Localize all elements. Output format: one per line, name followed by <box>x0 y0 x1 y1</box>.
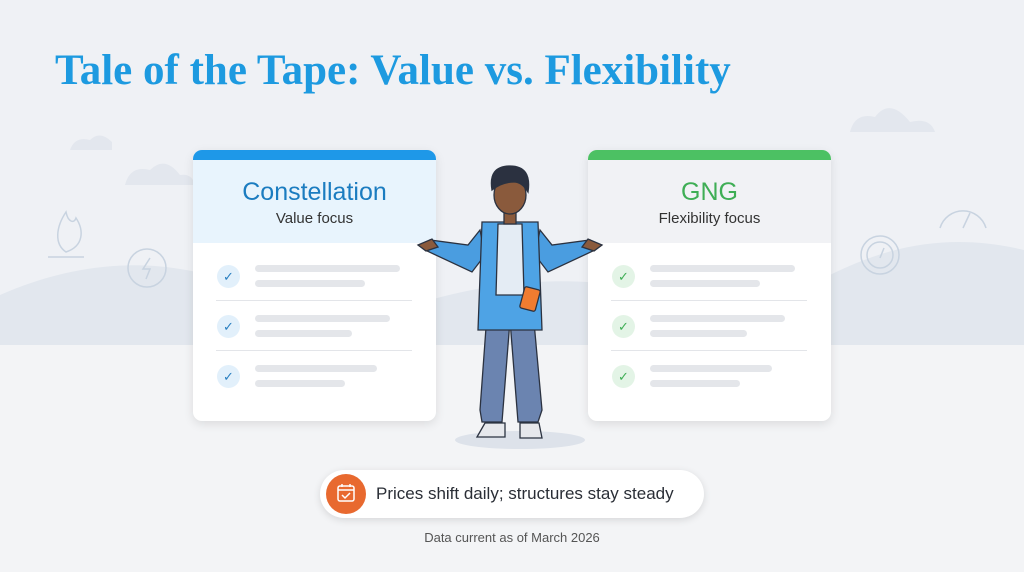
panel: Constellation: ✓ <box>223 269 234 284</box>
header: Constellation: Value focus <box>276 210 353 227</box>
panel: Constellation: ✓ <box>223 319 234 334</box>
panel: GNG <box>588 150 831 421</box>
callout: Prices shift daily; structures stay steady <box>376 484 674 503</box>
panel: GNG: ✓ <box>618 369 629 384</box>
header: Constellation: Constellation <box>242 178 387 206</box>
header: GNG <box>588 160 831 243</box>
header: GNG: Flexibility focus <box>659 210 760 227</box>
header: Constellation <box>193 160 436 243</box>
panel: GNG: ✓ <box>618 269 629 284</box>
illustration: shrugging person <box>416 165 604 449</box>
icon: flame <box>48 211 986 287</box>
icon: calendar <box>326 474 366 514</box>
panel: GNG: ✓ <box>618 319 629 334</box>
title: Tale of the Tape: Value vs. Flexibility <box>55 47 731 94</box>
panel: Constellation: ✓ <box>223 369 234 384</box>
panel: Constellation <box>193 150 436 421</box>
callout <box>320 470 704 518</box>
footnote: Data current as of March 2026 <box>424 530 600 545</box>
header: GNG: GNG <box>681 178 738 206</box>
